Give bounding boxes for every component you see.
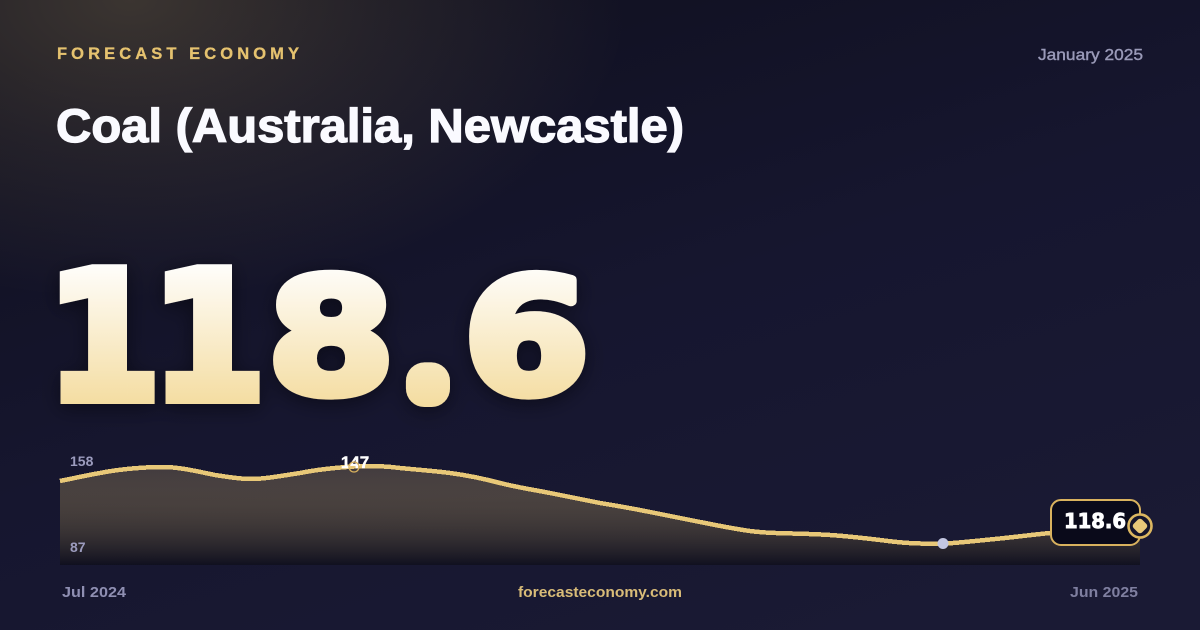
low marker xyxy=(938,538,948,549)
big value: 1 xyxy=(46,234,161,441)
start date: Jul 2024 xyxy=(62,584,127,601)
area under line xyxy=(60,466,1140,565)
current value marker xyxy=(1128,514,1152,538)
big value: 1 xyxy=(151,234,266,441)
peak value label: 147 xyxy=(341,453,369,472)
big value: . xyxy=(420,352,436,398)
line xyxy=(60,466,1140,544)
current value callout: 118.6 xyxy=(1064,509,1126,533)
peak marker xyxy=(349,462,359,472)
date label: January 2025 xyxy=(1038,47,1143,64)
axis max label: 158 xyxy=(70,453,94,469)
brand label: FORECAST ECONOMY xyxy=(57,45,299,63)
current value callout xyxy=(1051,500,1140,545)
big value xyxy=(46,234,589,441)
title: Coal (Australia, Newcastle) xyxy=(56,99,684,152)
big value: 6 xyxy=(464,246,589,431)
area chart xyxy=(60,453,1152,565)
source url: forecasteconomy.com xyxy=(518,584,682,601)
big value: 8 xyxy=(268,246,395,430)
axis min label: 87 xyxy=(70,539,86,555)
end date: Jun 2025 xyxy=(1070,584,1138,601)
